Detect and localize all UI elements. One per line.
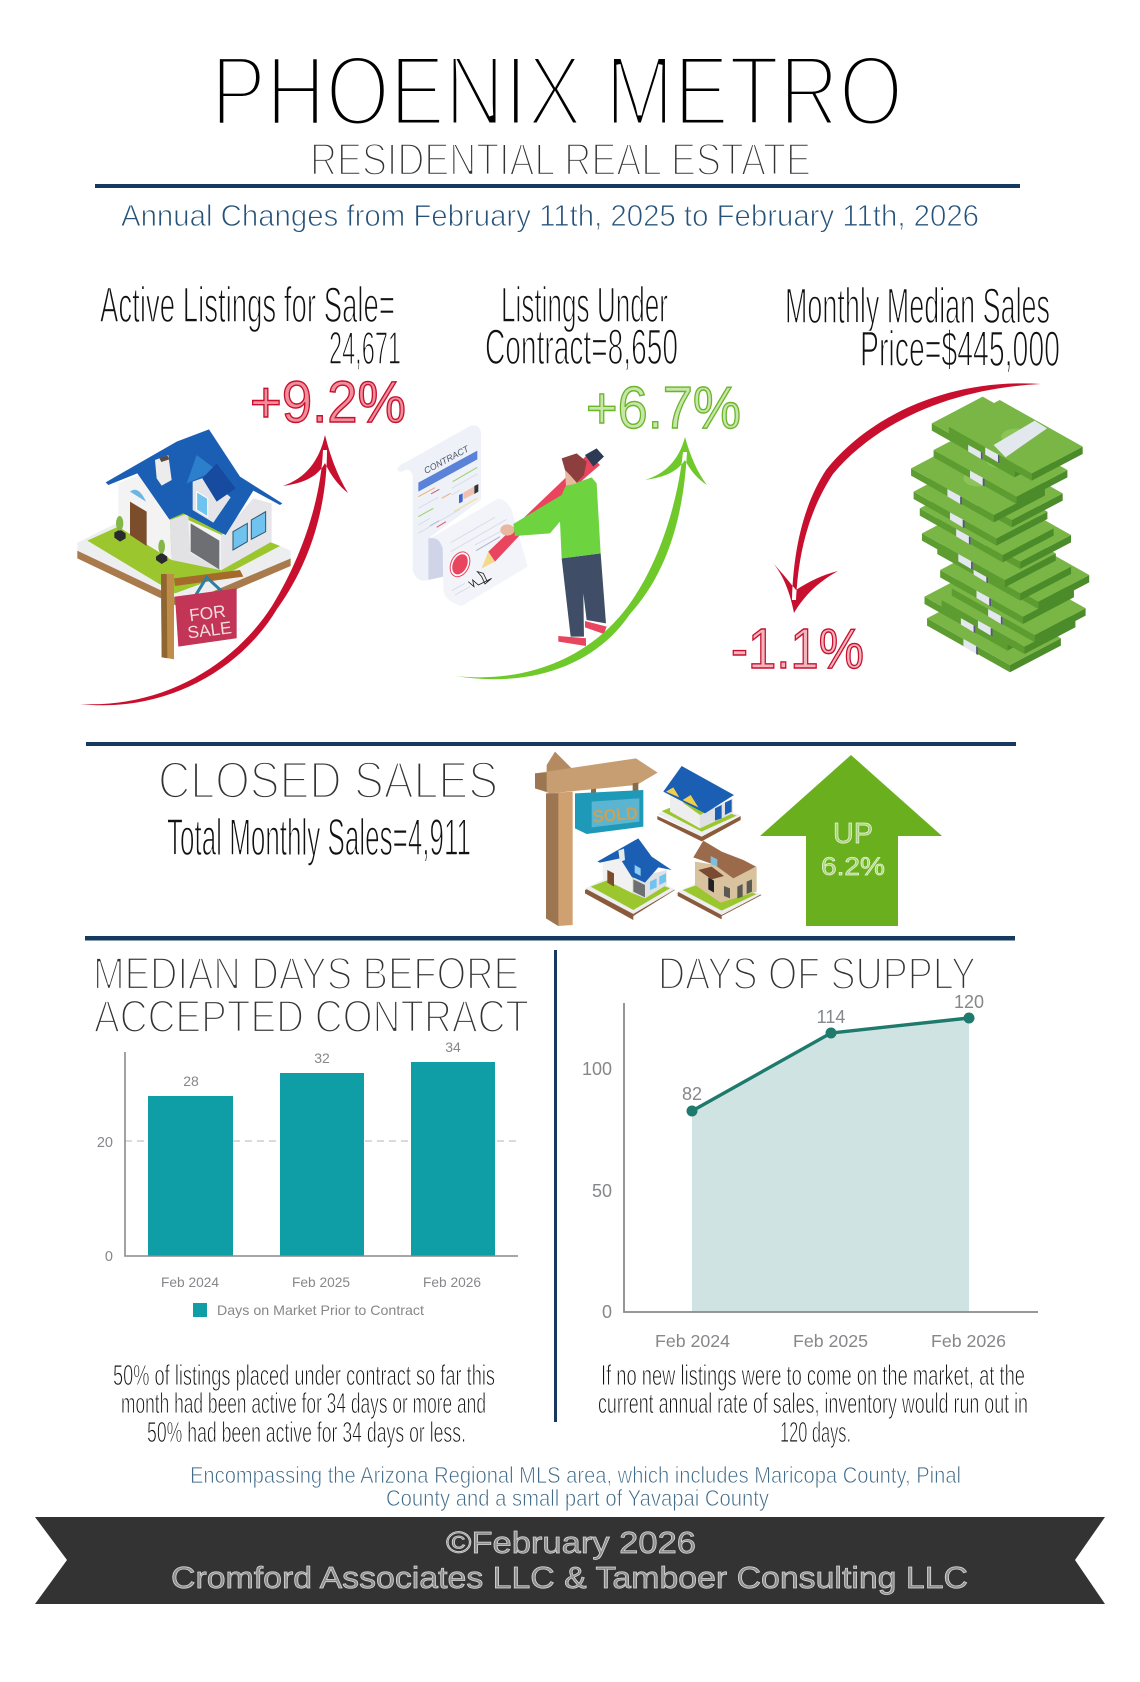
- section rule: [86, 742, 1016, 746]
- subtitle: RESIDENTIAL REAL ESTATE: [310, 134, 811, 185]
- icon: person signing contract: CONTRACT: [422, 443, 472, 476]
- arrow: green up: [455, 437, 707, 679]
- area chart: Feb 2024: [655, 1331, 730, 1351]
- bar chart: 0: [105, 1249, 113, 1265]
- area chart: Feb 2026: [931, 1331, 1006, 1351]
- area chart: Feb 2025: [793, 1331, 868, 1351]
- bar chart: Feb 2026: [423, 1274, 481, 1290]
- area chart: 114: [817, 1007, 845, 1027]
- median days note: [113, 1360, 495, 1449]
- panel: days of supply: [582, 948, 1038, 1449]
- closed sales total: Total Monthly Sales=4,911: [167, 809, 471, 867]
- icon: house for sale: [77, 429, 291, 659]
- icon: person signing contract: [397, 425, 607, 646]
- bar chart: 28: [183, 1073, 199, 1089]
- panel: listings under contract: [397, 277, 741, 679]
- change value -1.1%: -1.1%: [731, 617, 864, 681]
- active listings text: Active Listings for Sale=: [100, 277, 395, 333]
- icon: house for sale: FOR: [188, 601, 227, 625]
- arrow: green up with value: UP: [833, 818, 873, 850]
- area chart: 82: [682, 1084, 702, 1104]
- days of supply note: 120 days.: [780, 1417, 851, 1449]
- under contract text: [485, 277, 678, 375]
- change value +6.7%: +6.7%: [586, 375, 741, 441]
- date range subheading: Annual Changes from February 11th, 2025 to February 11th, 2026: [121, 198, 979, 233]
- bar chart: 32: [314, 1050, 330, 1066]
- panel: median sales price: [731, 278, 1089, 681]
- median days note: month had been active for 34 days or more and: [121, 1388, 486, 1420]
- bar chart: 20: [97, 1135, 113, 1151]
- area chart: [582, 992, 1038, 1351]
- company names: Cromford Associates LLC & Tamboer Consulting LLC: [171, 1560, 968, 1595]
- bar chart: Feb 2024: [161, 1274, 219, 1290]
- under contract text: Contract=8,650: [485, 319, 678, 375]
- legend: Days on Market Prior to Contract: [217, 1302, 424, 1318]
- area chart: 0: [602, 1302, 612, 1322]
- arrow: green up with value: 6.2%: [821, 853, 885, 881]
- active listings text: [100, 277, 401, 374]
- panel: median days: [93, 948, 529, 1449]
- median days heading: MEDIAN DAYS BEFORE: [93, 948, 519, 999]
- median days heading: [93, 948, 529, 1042]
- area chart: 100: [582, 1059, 612, 1079]
- days of supply heading: DAYS OF SUPPLY: [658, 948, 976, 999]
- header rule: [95, 184, 1020, 188]
- median days heading: ACCEPTED CONTRACT: [94, 991, 529, 1042]
- bar chart: [97, 1039, 518, 1318]
- days of supply note: [598, 1360, 1028, 1449]
- area chart: 120: [954, 992, 984, 1012]
- panel: active listings: [77, 277, 406, 705]
- bar chart: 34: [445, 1039, 461, 1055]
- footer banner: [35, 1517, 1105, 1604]
- median price text: [785, 278, 1060, 377]
- icon: stack of cash: [911, 397, 1089, 672]
- panel: closed sales: [158, 752, 942, 926]
- median days note: 50% had been active for 34 days or less.: [147, 1417, 466, 1449]
- coverage note: County and a small part of Yavapai County: [386, 1485, 769, 1511]
- under contract text: Listings Under: [501, 277, 668, 333]
- section rule: [85, 936, 1015, 940]
- median days note: 50% of listings placed under contract so far this: [113, 1360, 495, 1392]
- active listings text: 24,671: [329, 322, 401, 374]
- icon: house for sale: SALE: [186, 617, 233, 643]
- coverage note: Encompassing the Arizona Regional MLS area, which includes Maricopa County, Pinal: [190, 1462, 961, 1488]
- area chart: 50: [592, 1181, 612, 1201]
- icon: sold sign and houses: [535, 752, 762, 926]
- vertical divider: [554, 950, 557, 1422]
- arrow: red up: [80, 435, 348, 705]
- arrow: green up with value: [760, 755, 942, 926]
- closed sales heading: CLOSED SALES: [158, 752, 498, 810]
- coverage note: [190, 1462, 961, 1511]
- copyright date: ©February 2026: [446, 1525, 696, 1560]
- arrow: red down: [773, 383, 1041, 613]
- icon: sold sign and houses: SOLD: [592, 803, 638, 827]
- title: PHOENIX METRO: [211, 35, 903, 146]
- bar chart: Feb 2025: [292, 1274, 350, 1290]
- change value +9.2%: +9.2%: [250, 370, 406, 435]
